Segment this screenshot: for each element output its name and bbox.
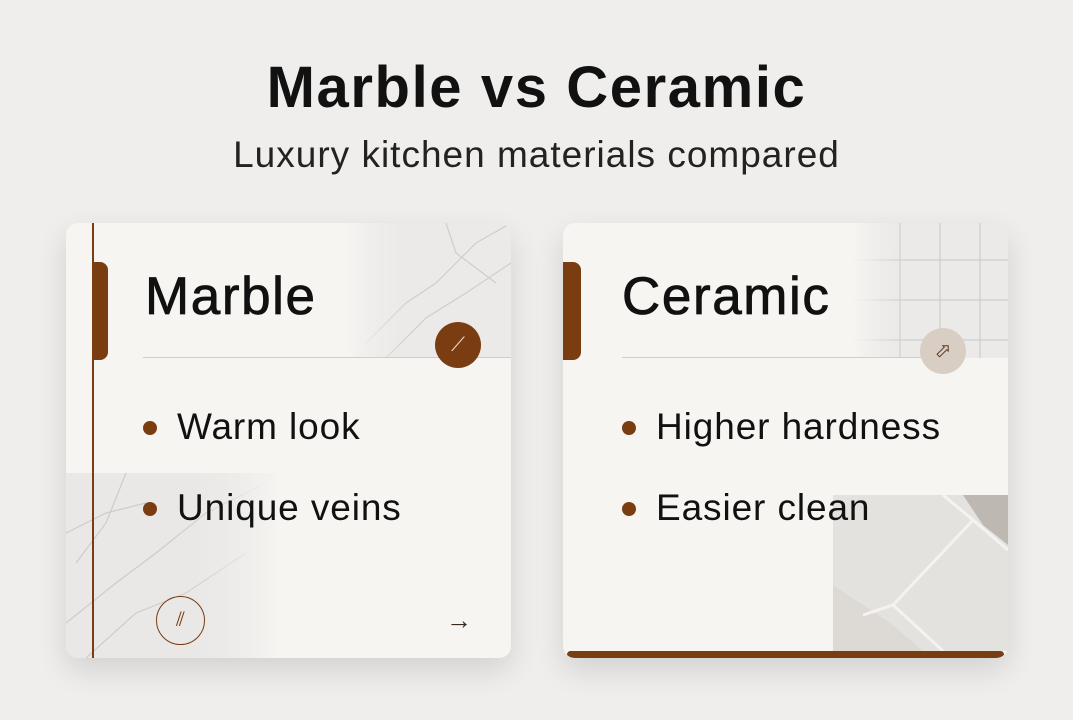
bottom accent bar [567,651,1004,658]
vertical accent line [92,223,94,658]
tile grid texture [863,223,1008,358]
marble texture bottom left [66,473,264,658]
tile photo bottom right [833,495,1008,651]
heading: Ceramic: Ceramic [622,267,831,326]
accent tab [92,262,108,360]
marble texture top right [366,223,511,357]
bullet: warm look: Warm look [177,406,361,447]
icon: marble chip: ⟋ [451,334,465,356]
arrow: → [446,605,472,635]
icon: veins circle [156,596,205,645]
heading: Marble: Marble [145,267,317,326]
bullet: easier clean: Easier clean [656,487,870,528]
icon: veins circle: ⫽ [176,609,185,631]
divider [143,357,511,358]
bullet: unique veins: Unique veins [177,487,402,528]
title: Marble vs Ceramic [267,55,806,120]
icon: tile: ⬀ [935,340,951,362]
panel: marble [66,223,511,658]
icon: tile [920,328,966,374]
panel: ceramic [563,223,1008,658]
divider [622,357,922,358]
accent tab [563,262,581,360]
subtitle: Luxury kitchen materials compared [233,134,840,175]
icon: marble chip [435,322,481,368]
bullet: higher hardness: Higher hardness [656,406,941,447]
